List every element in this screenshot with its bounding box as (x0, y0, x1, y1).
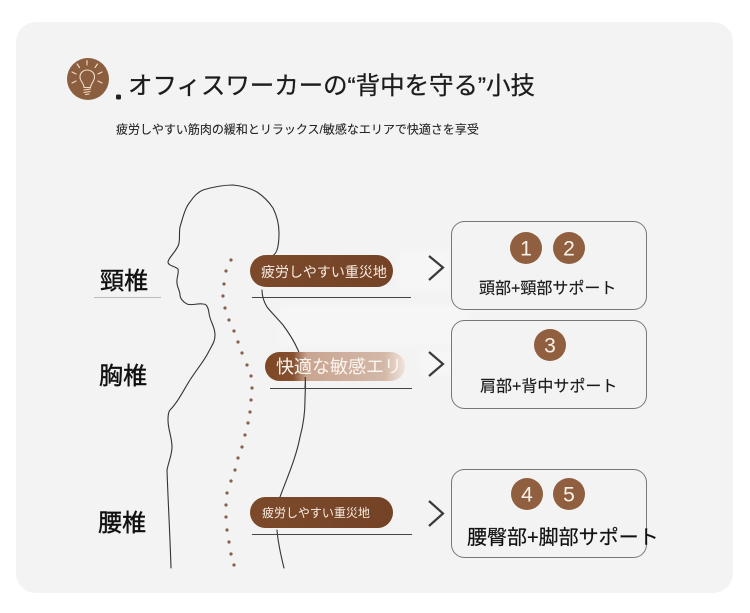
box: head and neck support (452, 222, 646, 310)
label: cervical spine: 頸椎 (100, 268, 148, 295)
spine dotted line (221, 258, 254, 567)
row 1 tag: fatigue-prone area: 疲労しやすい重災地 (261, 264, 387, 280)
box: head and neck support: 2 (563, 238, 575, 260)
box: shoulder and back support (452, 320, 646, 408)
box: shoulder and back support: 3 (544, 334, 556, 358)
body silhouette outline (167, 185, 305, 568)
row 1 tag: fatigue-prone area (250, 255, 411, 298)
arrow: row 3 (429, 501, 443, 526)
title bullet (116, 94, 121, 100)
row 3 tag: fatigue-prone area (250, 497, 412, 534)
row 2 tag: comfortable sensitive area: 快適な敏感エリ (276, 357, 402, 377)
box: hip and leg support: 5 (563, 484, 575, 506)
box: head and neck support: 頭部+頸部サポート (479, 280, 616, 298)
title icon: light bulb (67, 58, 109, 100)
subtitle: 疲労しやすい筋肉の緩和とリラックス/敏感なエリアで快適さを享受 (116, 122, 479, 136)
label: cervical spine (94, 268, 161, 298)
row 2 tag: comfortable sensitive area (265, 352, 412, 388)
arrow: row 2 (429, 352, 443, 376)
label: thoracic spine: 胸椎 (99, 363, 147, 390)
box: head and neck support: 1 (520, 238, 532, 260)
arrow: row 1 (429, 256, 443, 280)
box: hip and leg support: 腰臀部+脚部サポート (467, 526, 659, 549)
row 3 tag: fatigue-prone area: 疲労しやすい重災地 (262, 506, 370, 520)
title: オフィスワーカーの“背中を守る”小技 (128, 72, 535, 100)
box: hip and leg support: 4 (521, 484, 533, 506)
box: shoulder and back support: 肩部+背中サポート (480, 378, 617, 396)
box: hip and leg support (452, 470, 659, 558)
label: lumbar spine: 腰椎 (98, 510, 146, 537)
